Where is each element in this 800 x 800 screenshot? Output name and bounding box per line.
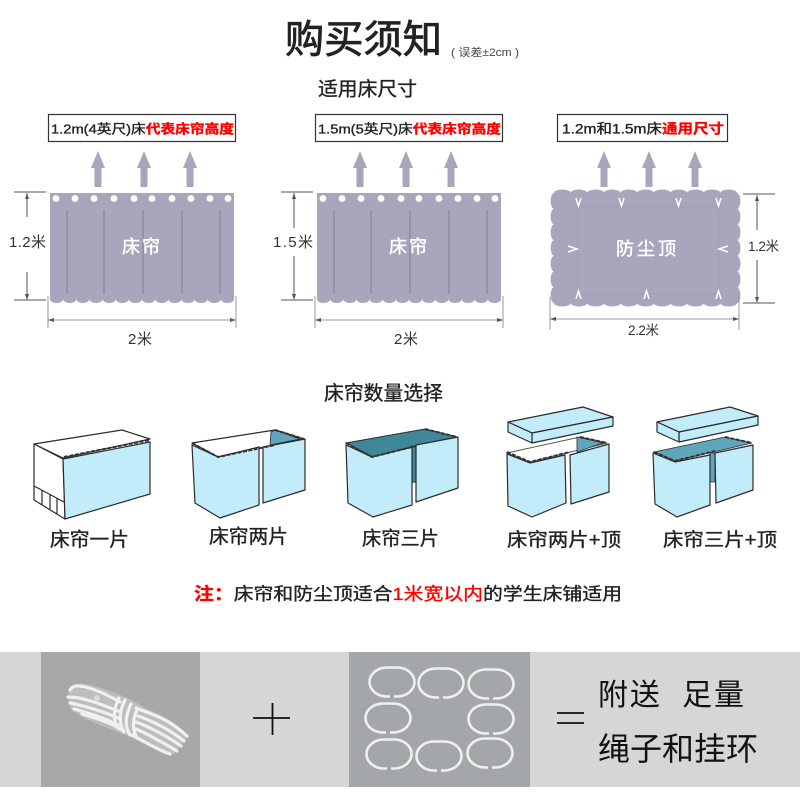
heading: applicable bed size: 适用床尺寸 bbox=[318, 78, 417, 100]
caption: three curtains: 床帘三片 bbox=[362, 528, 439, 550]
label box: 1.2m bbox=[48, 114, 236, 142]
photo: rope bbox=[41, 652, 200, 787]
icon: one curtain bbox=[34, 430, 150, 519]
height dimension 1.2米: 1.2米 bbox=[9, 234, 46, 251]
label box: dust cover: 1.2m和1.5m床 通用尺寸 bbox=[562, 120, 724, 136]
dust cover shape bbox=[551, 190, 740, 306]
height dimension 1.2米: 1.2米 bbox=[748, 239, 780, 254]
panel: 1.2m curtain bbox=[9, 114, 236, 348]
width dimension 2米: 2米 bbox=[394, 331, 418, 348]
arrows up bbox=[353, 151, 458, 187]
photo: hanging rings bbox=[349, 652, 530, 787]
label box: 1.5m bbox=[316, 114, 502, 142]
dust cover shape: 防尘顶 bbox=[616, 239, 676, 259]
icon: two curtains bbox=[192, 430, 305, 518]
label box: dust cover bbox=[558, 114, 728, 142]
plus sign bbox=[253, 703, 290, 735]
height dimension 1.2米 bbox=[743, 194, 780, 303]
gift text line 1: 附送 足量 bbox=[598, 679, 744, 712]
caption: three curtains plus top: 床帘三片+顶 bbox=[663, 529, 777, 551]
label box: 1.5m: 1.5m(5英尺)床 代表床帘高度 bbox=[318, 122, 501, 136]
caption: two curtains plus top: 床帘两片+顶 bbox=[507, 529, 621, 551]
height dimension 1.5米: 1.5米 bbox=[273, 234, 313, 251]
icon: two curtains with top bbox=[507, 407, 613, 517]
height dimension 1.2米 bbox=[9, 192, 46, 300]
arrows up bbox=[91, 151, 197, 187]
tolerance note: ( 误差±2cm ) bbox=[451, 45, 519, 59]
width dimension 2米 bbox=[315, 296, 503, 348]
arrows up bbox=[597, 151, 702, 187]
label box: 1.2m: 1.2m(4英尺)床 代表床帘高度 bbox=[51, 122, 234, 136]
height dimension 1.5米 bbox=[273, 192, 313, 300]
curtain shape bbox=[50, 193, 234, 303]
curtain shape: 床帘 bbox=[122, 237, 160, 257]
width dimension 2米 bbox=[48, 296, 236, 348]
caption: two curtains: 床帘两片 bbox=[209, 526, 288, 548]
panel: 1.5m curtain bbox=[273, 114, 503, 348]
width dimension 2米: 2米 bbox=[128, 331, 152, 348]
icon: three curtains bbox=[346, 429, 458, 517]
curtain shape bbox=[317, 193, 501, 303]
curtain shape: 床帘 bbox=[389, 237, 427, 257]
panel: gifts band bbox=[0, 652, 800, 787]
gift text line 2: 绳子和挂环 bbox=[598, 731, 758, 767]
panel: dust cover bbox=[550, 114, 780, 338]
caption: one curtain: 床帘一片 bbox=[50, 529, 129, 551]
width dimension 2.2米: 2.2米 bbox=[628, 323, 660, 338]
equals sign bbox=[557, 713, 584, 723]
heading: curtain quantity: 床帘数量选择 bbox=[324, 383, 443, 405]
title: 购买须知 bbox=[285, 19, 442, 62]
width dimension 2.2米 bbox=[550, 297, 739, 338]
icon: three curtains with top bbox=[653, 407, 758, 517]
note: 注： 床帘和防尘顶适合 1米宽以内 的学生床铺适用 bbox=[194, 584, 622, 604]
